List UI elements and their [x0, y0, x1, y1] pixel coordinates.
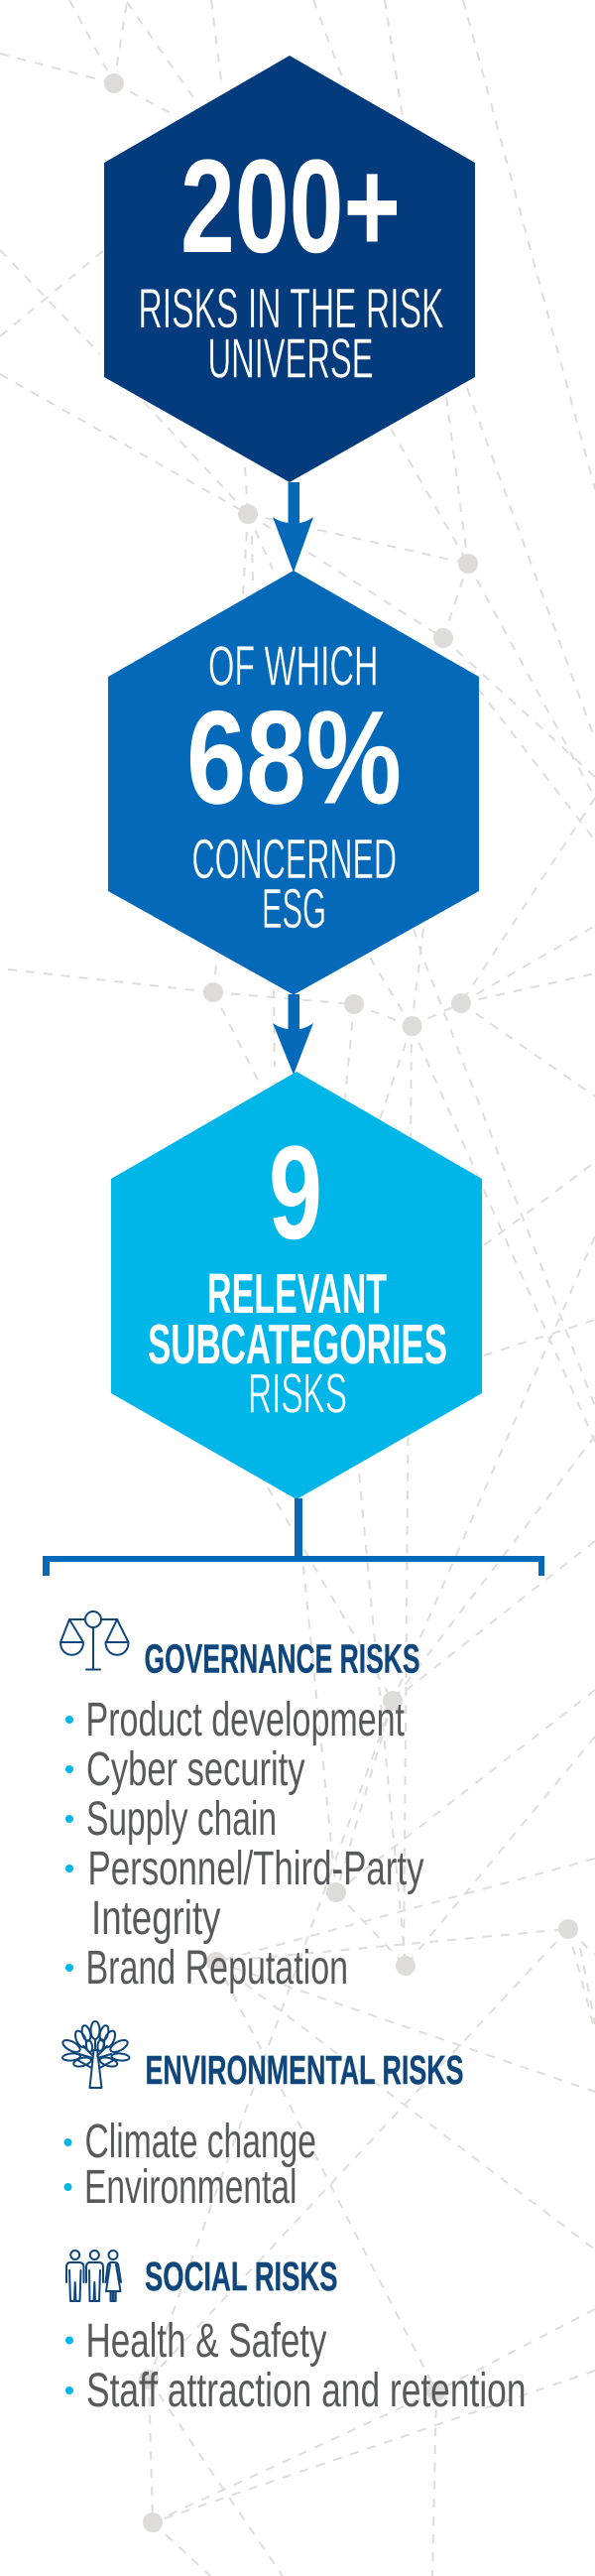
text: relevant: RELEVANT [207, 1262, 387, 1325]
heading: governance risks: GOVERNANCE RISKS [145, 1635, 420, 1681]
arrow: from first to second hexagon [273, 482, 313, 573]
text: concerned: CONCERNED [192, 828, 397, 890]
icon: tree [60, 2021, 130, 2088]
list: governance items: Integrity [91, 1892, 220, 1945]
list: social items: Health & Safety [85, 2315, 327, 2368]
list: governance items [65, 1694, 424, 1995]
section: social risks [65, 2251, 526, 2417]
text: of which: OF WHICH [208, 635, 379, 697]
list: governance items: Brand Reputation [85, 1942, 348, 1995]
text: risks: RISKS [248, 1361, 347, 1425]
list: environmental items: Climate change [85, 2116, 316, 2168]
icon: people [66, 2251, 121, 2301]
section: governance risks [60, 1611, 424, 1995]
list: environmental items [63, 2116, 316, 2214]
panel: hexagon 68% [108, 571, 479, 994]
icon: scales [60, 1611, 129, 1669]
number: 9: 9 [269, 1119, 322, 1267]
text: ESG: ESG [262, 877, 326, 940]
arrow: from second to third hexagon [273, 994, 313, 1075]
panel: hexagon 200+ [104, 56, 475, 482]
bracket connector [43, 1498, 544, 1576]
list: governance items: Cyber security [86, 1743, 305, 1796]
list: social items [65, 2315, 526, 2417]
list: governance items: Personnel/Third-Party [87, 1843, 424, 1895]
text: universe: UNIVERSE [208, 327, 373, 389]
panel: hexagon 9 [111, 1072, 482, 1499]
number: 200+: 200+ [180, 133, 401, 281]
heading: social risks: SOCIAL RISKS [145, 2254, 337, 2299]
list: governance items: Product development [85, 1694, 405, 1746]
number: 68%: 68% [186, 685, 402, 832]
list: environmental items: Environmental [84, 2161, 298, 2214]
list: governance items: Supply chain [86, 1793, 277, 1846]
section: environmental risks [60, 2021, 463, 2214]
